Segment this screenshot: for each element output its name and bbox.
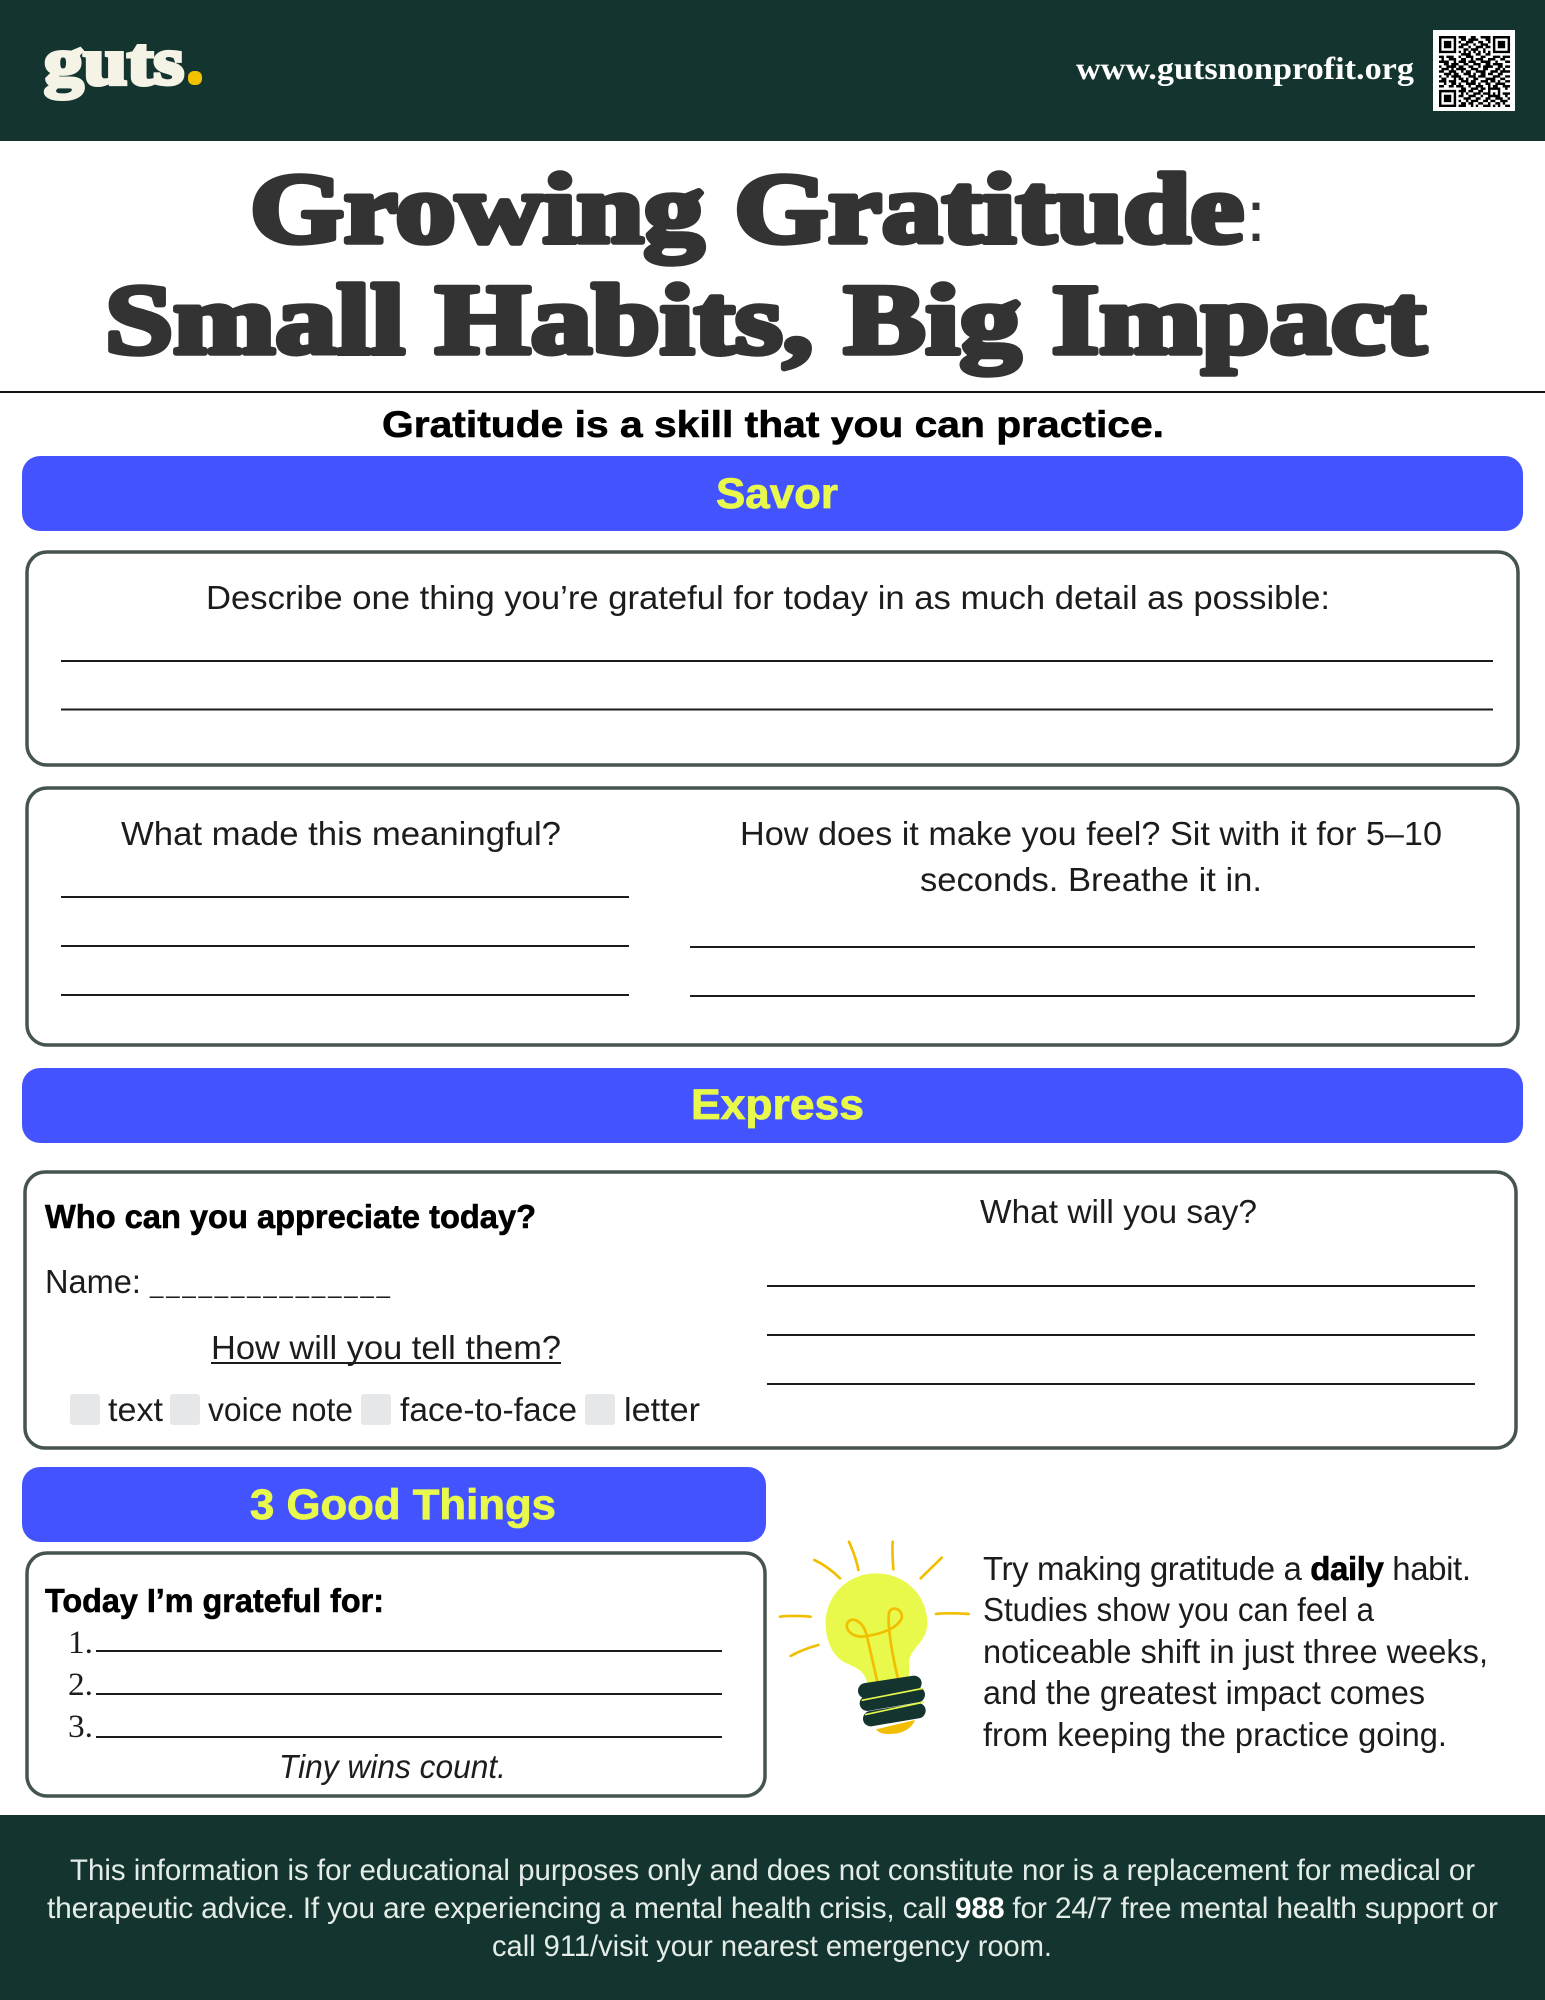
section heading: 3 Good Things xyxy=(22,1467,766,1542)
panel: who can you appreciate xyxy=(25,1172,1516,1448)
footer disclaimer: call 911/visit your nearest emergency room. xyxy=(492,1930,1052,1963)
callout: daily habit xyxy=(983,1550,1488,1753)
section heading: Savor: Savor xyxy=(716,470,838,518)
checkbox options: letter xyxy=(624,1391,700,1428)
panel: today I'm grateful for: 1. xyxy=(68,1625,93,1661)
section heading: Express xyxy=(22,1068,1523,1143)
prompt: feeling: seconds. Breathe it in. xyxy=(920,861,1262,898)
panel: today I'm grateful for xyxy=(27,1553,765,1796)
callout: daily habit: and the greatest impact comes xyxy=(983,1674,1425,1711)
panel: meaning and feeling xyxy=(27,788,1518,1045)
panel: describe one thing xyxy=(27,552,1518,765)
checkbox options xyxy=(70,1391,700,1428)
footer disclaimer: therapeutic advice. If you are experiencing a mental health crisis, call 988 for 24/7 free mental health support or xyxy=(47,1892,1498,1925)
panel: today I'm grateful for: Tiny wins count. xyxy=(279,1748,506,1785)
checkbox options: face-to-face xyxy=(400,1391,577,1428)
name field: Name: xyxy=(45,1263,141,1300)
prompt: feeling xyxy=(690,815,1475,996)
checkbox options: voice note xyxy=(208,1391,353,1428)
question heading: Who can you appreciate today? xyxy=(45,1198,536,1235)
title xyxy=(105,153,1426,375)
callout: daily habit: from keeping the practice going. xyxy=(983,1716,1447,1753)
subtitle: Gratitude is a skill that you can practice. xyxy=(382,404,1164,445)
callout: daily habit: Try making gratitude a daily habit. xyxy=(983,1550,1471,1587)
section heading: Savor xyxy=(22,456,1523,531)
name field xyxy=(45,1263,391,1300)
panel: today I'm grateful for: Today I’m grateful for: xyxy=(45,1582,384,1619)
icon: light bulb xyxy=(780,1542,969,1734)
footer disclaimer xyxy=(0,1815,1545,2000)
prompt: meaningful: What made this meaningful? xyxy=(121,815,561,852)
callout: daily habit: noticeable shift in just three weeks, xyxy=(983,1633,1488,1670)
panel: describe one thing: Describe one thing you’re grateful for today in as much detail as possible: xyxy=(206,579,1330,616)
title: Growing Gratitude xyxy=(250,153,1244,264)
website url: www.gutsnonprofit.org xyxy=(1076,50,1414,86)
QR code xyxy=(1433,30,1515,111)
logo: guts: guts xyxy=(44,23,184,99)
checkbox options: text xyxy=(108,1391,163,1428)
how will you tell them: How will you tell them? xyxy=(211,1329,561,1366)
panel: today I'm grateful for: 2. xyxy=(68,1667,93,1703)
what will you say: What will you say? xyxy=(980,1193,1257,1230)
header band xyxy=(0,0,1545,141)
title: Small Habits, Big Impact xyxy=(105,264,1426,375)
what will you say xyxy=(767,1193,1475,1384)
name field: _______________ xyxy=(149,1272,391,1299)
title: : xyxy=(1246,177,1266,257)
footer disclaimer: This information is for educational purposes only and does not constitute nor is a replacement for medical or xyxy=(70,1854,1475,1887)
prompt: meaningful xyxy=(61,815,629,995)
callout: daily habit: Studies show you can feel a xyxy=(983,1591,1375,1628)
section heading: Express: Express xyxy=(691,1081,864,1129)
panel: today I'm grateful for: 3. xyxy=(68,1709,93,1745)
prompt: feeling: How does it make you feel? Sit with it for 5–10 xyxy=(740,815,1442,852)
section heading: 3 Good Things: 3 Good Things xyxy=(250,1481,556,1529)
